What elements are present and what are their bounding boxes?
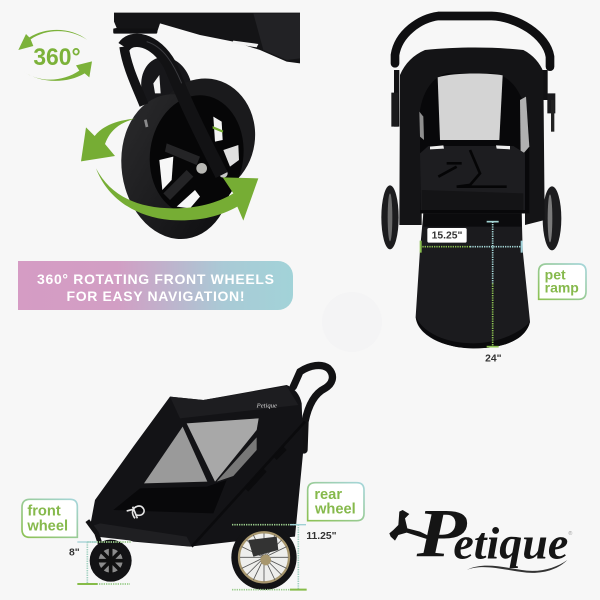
canopy xyxy=(90,385,303,547)
logo: Petique xyxy=(389,495,572,573)
watermark seal xyxy=(322,292,382,352)
dog silhouette xyxy=(389,510,432,541)
rear wheel xyxy=(231,525,297,590)
pet ramp label: ramp xyxy=(545,280,579,296)
360 degree label: 360° xyxy=(33,44,81,71)
rear wheel label xyxy=(308,483,364,521)
frame bar xyxy=(192,422,305,547)
ramp dimensions xyxy=(420,222,522,347)
front wheel xyxy=(90,540,132,582)
width label: 15.25" xyxy=(432,231,462,242)
fork xyxy=(124,40,222,175)
rear wheel height: 11.25" xyxy=(306,531,337,542)
banner: rotating front wheels: FOR EASY NAVIGATION! xyxy=(66,288,244,304)
front wheel label: front xyxy=(27,504,61,520)
swash xyxy=(467,560,567,573)
front wheel label: wheel xyxy=(26,518,68,534)
logo on canopy: Petique xyxy=(256,402,277,409)
registered mark: ® xyxy=(568,530,572,537)
front wheel label xyxy=(22,499,77,537)
banner text: 360° ROTATING FRONT WHEELS xyxy=(37,271,274,287)
handle xyxy=(395,16,550,67)
pet ramp label xyxy=(539,264,586,299)
wordmark: P xyxy=(415,495,468,571)
panel: rear view with pet ramp xyxy=(381,16,586,364)
rear wheels xyxy=(381,185,399,249)
small 360 icon xyxy=(18,30,92,81)
rear wheel label: rear xyxy=(314,487,342,503)
pet ramp label: pet xyxy=(545,266,566,282)
logo: Petique: etique xyxy=(453,519,568,569)
mesh windows xyxy=(144,427,207,483)
rear wheel label: wheel xyxy=(314,502,356,518)
ramp xyxy=(416,213,530,348)
width label xyxy=(427,228,467,243)
handle xyxy=(293,365,332,450)
P logo xyxy=(127,506,144,518)
panel: side view with wheels xyxy=(22,365,364,590)
front wheel xyxy=(112,28,263,246)
canopy body xyxy=(399,47,545,225)
panel: 360 degree front wheel xyxy=(18,13,300,246)
banner: rotating front wheels xyxy=(18,261,293,310)
length label: 24" xyxy=(485,353,502,364)
mesh window xyxy=(438,74,503,140)
stroller underside xyxy=(113,13,300,63)
seat xyxy=(420,146,525,210)
front wheel height: 8" xyxy=(69,547,80,558)
big rotation arrows xyxy=(81,119,258,221)
wheel dimensions xyxy=(77,525,307,590)
